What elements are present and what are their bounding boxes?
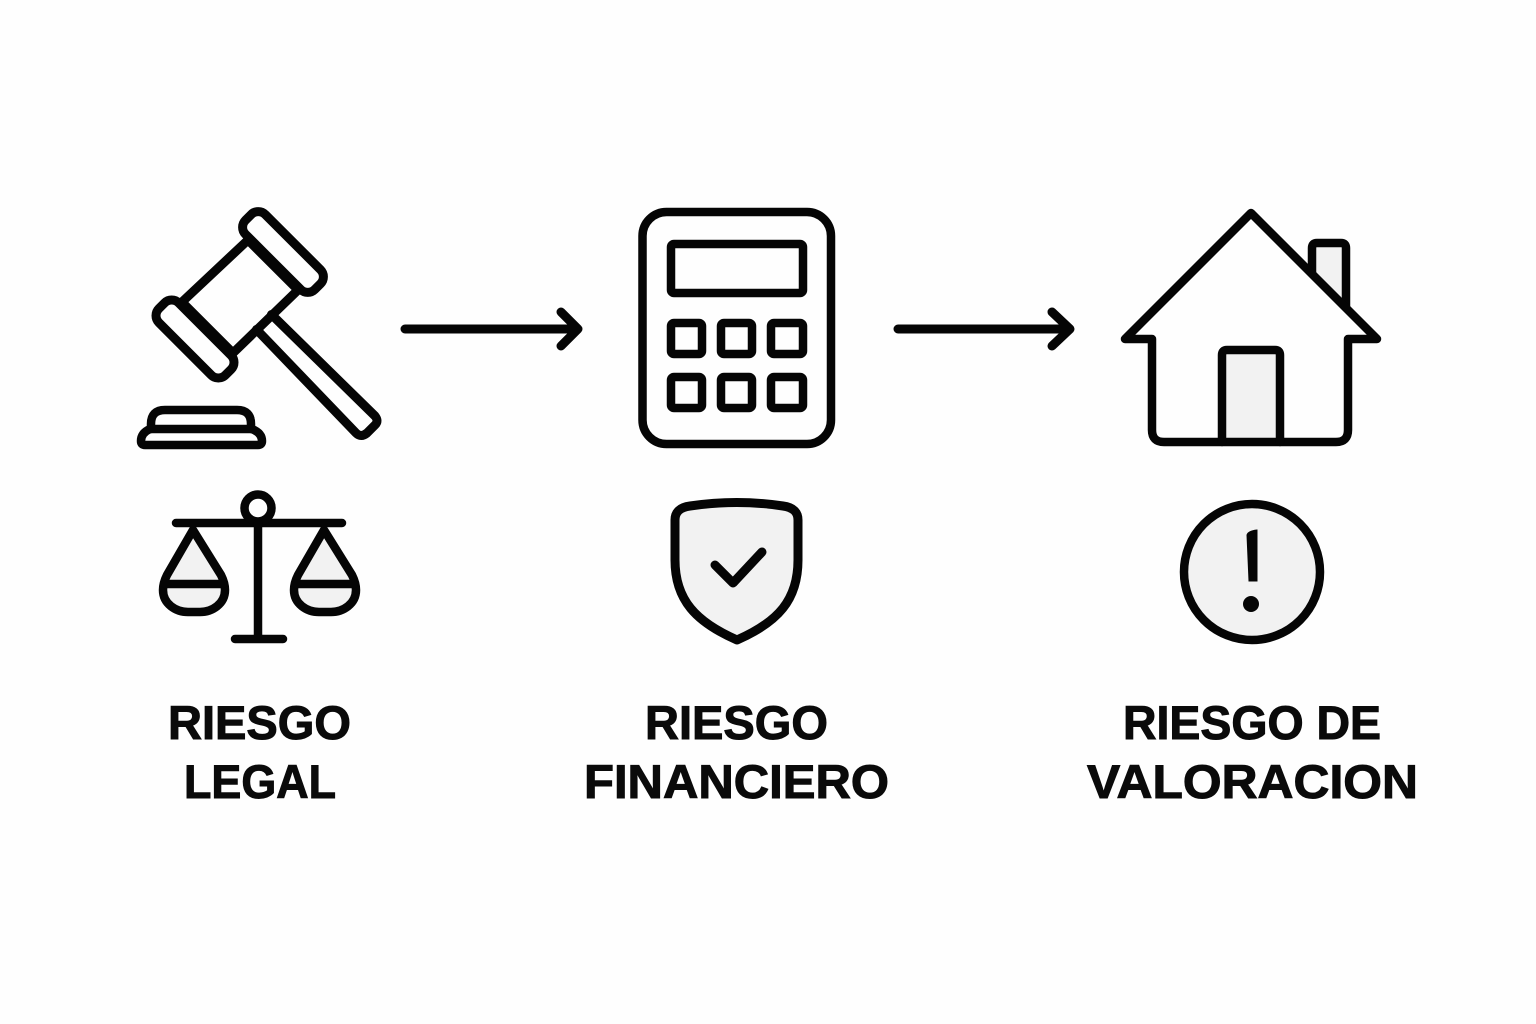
label: riesgo financiero: RIESGO	[645, 696, 828, 749]
icon: shield with check	[675, 502, 798, 640]
label: riesgo financiero	[584, 696, 889, 808]
label: riesgo de valoracion: RIESGO DE	[1123, 696, 1381, 749]
label: riesgo de valoracion	[1087, 696, 1418, 808]
icon: gavel	[141, 207, 377, 445]
icon: warning circle	[1184, 504, 1320, 640]
icon: calculator	[642, 212, 831, 444]
label: riesgo legal: LEGAL	[184, 755, 336, 808]
icon: scales	[163, 494, 356, 639]
icon: house	[1125, 213, 1377, 442]
label: riesgo legal: RIESGO	[168, 696, 351, 749]
label: riesgo financiero: FINANCIERO	[584, 755, 889, 808]
label: riesgo de valoracion: VALORACION	[1087, 755, 1418, 808]
arrow: financial to valuation	[898, 312, 1070, 346]
arrow: legal to financial	[405, 312, 578, 346]
label: riesgo legal	[168, 696, 351, 808]
